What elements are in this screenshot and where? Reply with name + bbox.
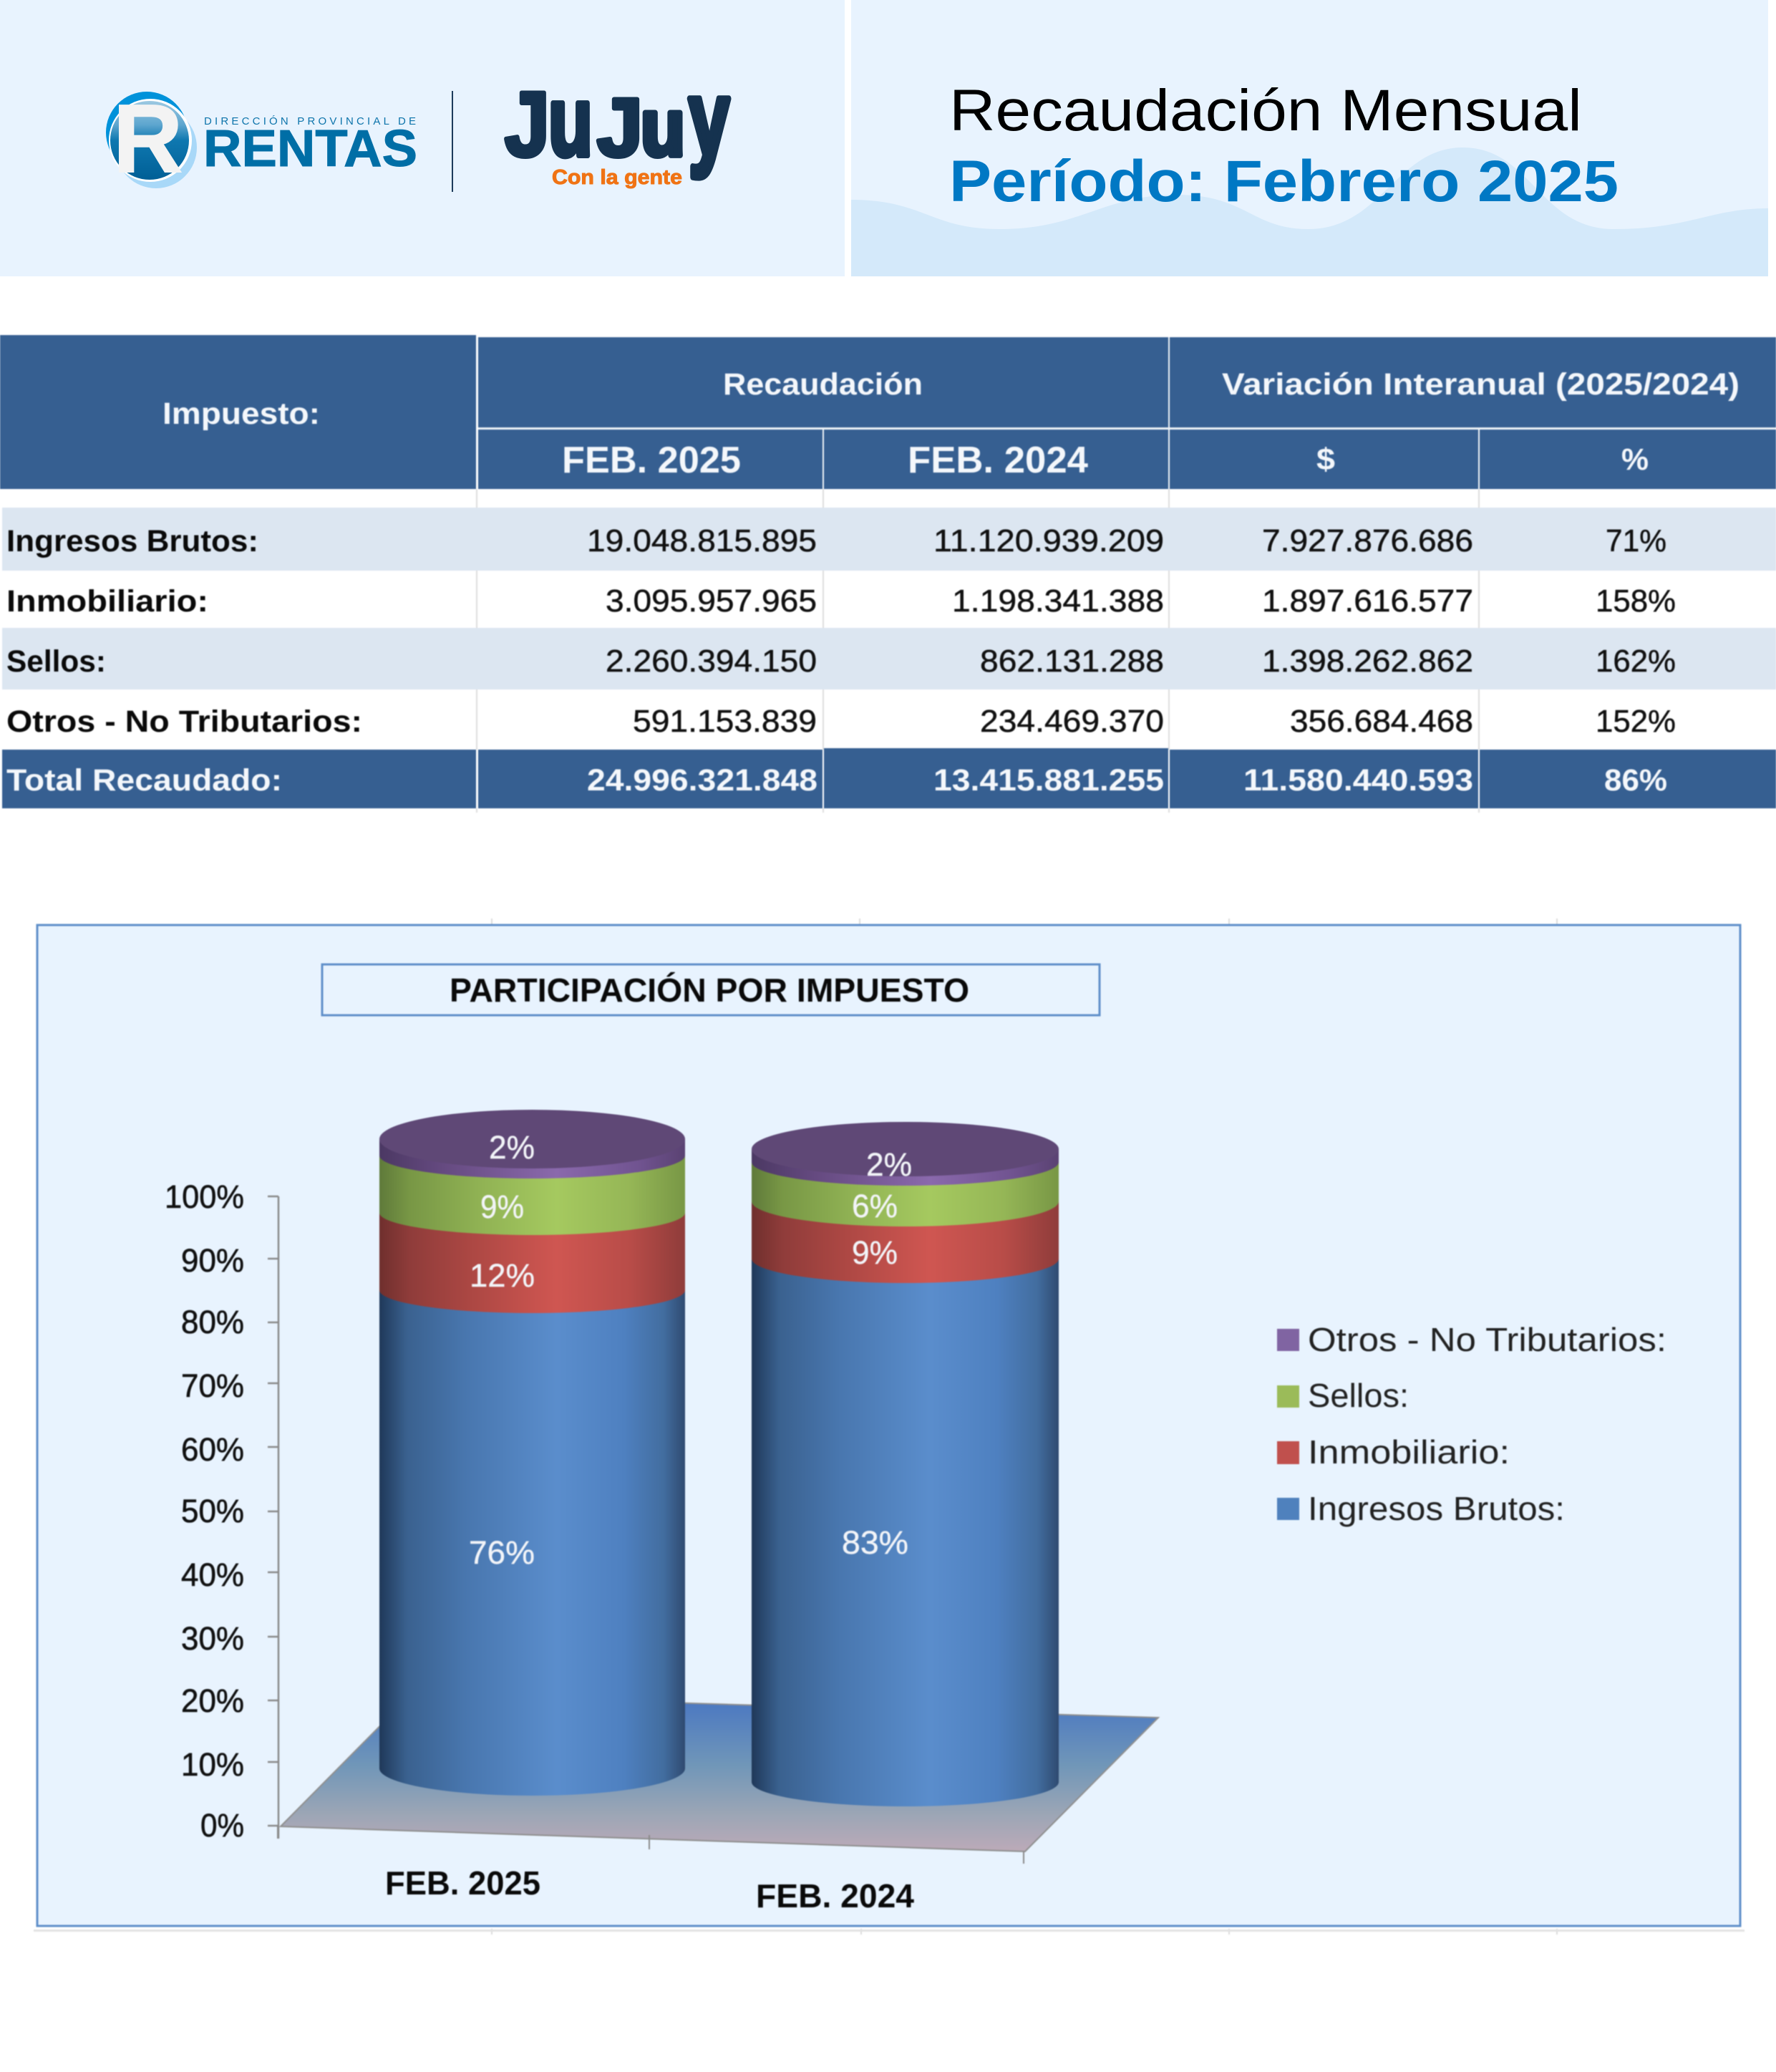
row: Sellos: 1.398.262.862 [1262,644,1473,679]
chart floor [278,1695,1158,1864]
row: Otros - No Tributarios: 234.469.370 [980,704,1164,739]
logo: Dirección Provincial de Rentas: DIRECCIÓN PROVINCIAL DE [204,115,416,127]
row: Total Recaudado: Total Recaudado: [6,763,282,798]
row: Otros - No Tributarios: Otros - No Tributarios: [6,705,362,739]
chart title [322,964,1100,1015]
row: Total Recaudado: 11.580.440.593 [1243,763,1473,798]
row: Ingresos Brutos: 11.120.939.209 [933,523,1164,558]
y axis: 100% [165,1178,244,1215]
logo: Jujuy con la gente: y [689,58,729,178]
wave decoration [851,147,1768,276]
legend: Sellos: [1308,1377,1409,1414]
y axis: 40% [181,1557,244,1593]
cylinder: FEB. 2024: 2% [866,1146,912,1183]
y axis: 80% [181,1304,244,1340]
y axis: 70% [181,1367,244,1404]
table header [0,335,1776,489]
row: Ingresos Brutos: 71% [1606,523,1666,558]
table header: Variación Interanual (2025/2024) [1222,367,1739,402]
row: Total Recaudado: 13.415.881.255 [933,763,1164,798]
header panel: logos [0,0,845,276]
table header: FEB. 2025 [562,440,741,481]
cylinder: FEB. 2025: 12% [470,1257,535,1294]
row: Ingresos Brutos: 19.048.815.895 [587,523,817,558]
row: Inmobiliario: 158% [1596,584,1676,619]
y axis: 90% [181,1242,244,1279]
category labels [385,1864,914,1914]
logo: Jujuy con la gente: u [641,83,685,173]
revenue table [0,335,1776,813]
y axis: 10% [181,1746,244,1783]
row: Sellos: 2.260.394.150 [606,644,817,679]
row: Otros - No Tributarios: 591.153.839 [633,704,817,739]
row: Ingresos Brutos: 7.927.876.686 [1262,523,1473,558]
row: Inmobiliario: Inmobiliario: [6,584,208,619]
cylinder: FEB. 2024: 6% [852,1188,898,1224]
cylinder: FEB. 2024 [752,1122,1059,1806]
title text: Recaudación Mensual [949,78,1582,143]
row: Ingresos Brutos [6,523,1666,558]
logo: Jujuy con la gente [505,58,729,189]
row: Inmobiliario: 1.198.341.388 [952,584,1164,619]
y axis [165,1178,278,1844]
table header: Recaudación [723,367,923,402]
row: Sellos [6,644,1676,679]
legend: Otros - No Tributarios: [1308,1321,1666,1358]
row: Sellos: 862.131.288 [980,644,1164,679]
logo: Jujuy con la gente: Con la gente [552,166,682,189]
legend: Inmobiliario: [1308,1433,1510,1471]
row: Otros - No Tributarios: 356.684.468 [1290,704,1473,739]
table header: $ [1316,442,1335,477]
period text: Período: Febrero 2025 [949,149,1619,214]
cylinder: FEB. 2024: 83% [842,1524,908,1561]
y axis: 30% [181,1620,244,1657]
row backgrounds and grid [2,489,1776,813]
logo: Dirección Provincial de Rentas: R [113,84,183,193]
y axis: 0% [200,1807,244,1844]
row: Inmobiliario: 1.897.616.577 [1262,584,1473,619]
logo: Dirección Provincial de Rentas [106,84,417,193]
cylinder: FEB. 2025: 2% [489,1129,535,1166]
legend [1277,1321,1666,1527]
logo: Jujuy con la gente: J [597,82,643,174]
chart panel: participación por impuesto [34,919,1745,1935]
y axis: 60% [181,1431,244,1468]
row: Otros - No Tributarios: 152% [1596,704,1676,739]
cylinder: FEB. 2025 [379,1110,685,1796]
row: Inmobiliario: 3.095.957.965 [606,584,817,619]
cylinder: FEB. 2025: 76% [469,1534,535,1571]
y axis: 20% [181,1683,244,1719]
row: Inmobiliario [6,584,1676,619]
logo: Jujuy con la gente: J [505,74,550,176]
cylinder: FEB. 2024: 9% [852,1234,898,1271]
chart title: PARTICIPACIÓN POR IMPUESTO [450,972,969,1009]
cylinder: FEB. 2025: 9% [480,1189,524,1225]
row: Sellos: Sellos: [6,644,106,679]
table header: FEB. 2024 [908,440,1088,481]
header panel: title [851,0,1768,276]
category labels: FEB. 2024 [756,1877,914,1914]
row: Total Recaudado: 24.996.321.848 [587,763,817,798]
row: Total Recaudado: 86% [1604,763,1667,798]
legend: Ingresos Brutos: [1308,1490,1565,1527]
table header: Impuesto: [162,397,320,431]
logo: Dirección Provincial de Rentas: RENTAS [203,120,417,178]
category labels: FEB. 2025 [385,1864,540,1902]
row: Ingresos Brutos: Ingresos Brutos: [6,524,258,558]
table header: % [1621,442,1649,477]
row: Otros - No Tributarios [6,704,1676,739]
y axis: 50% [181,1493,244,1529]
row: Sellos: 162% [1596,644,1676,679]
logo: Jujuy con la gente: u [548,67,593,177]
row: Total Recaudado [2,748,1776,808]
